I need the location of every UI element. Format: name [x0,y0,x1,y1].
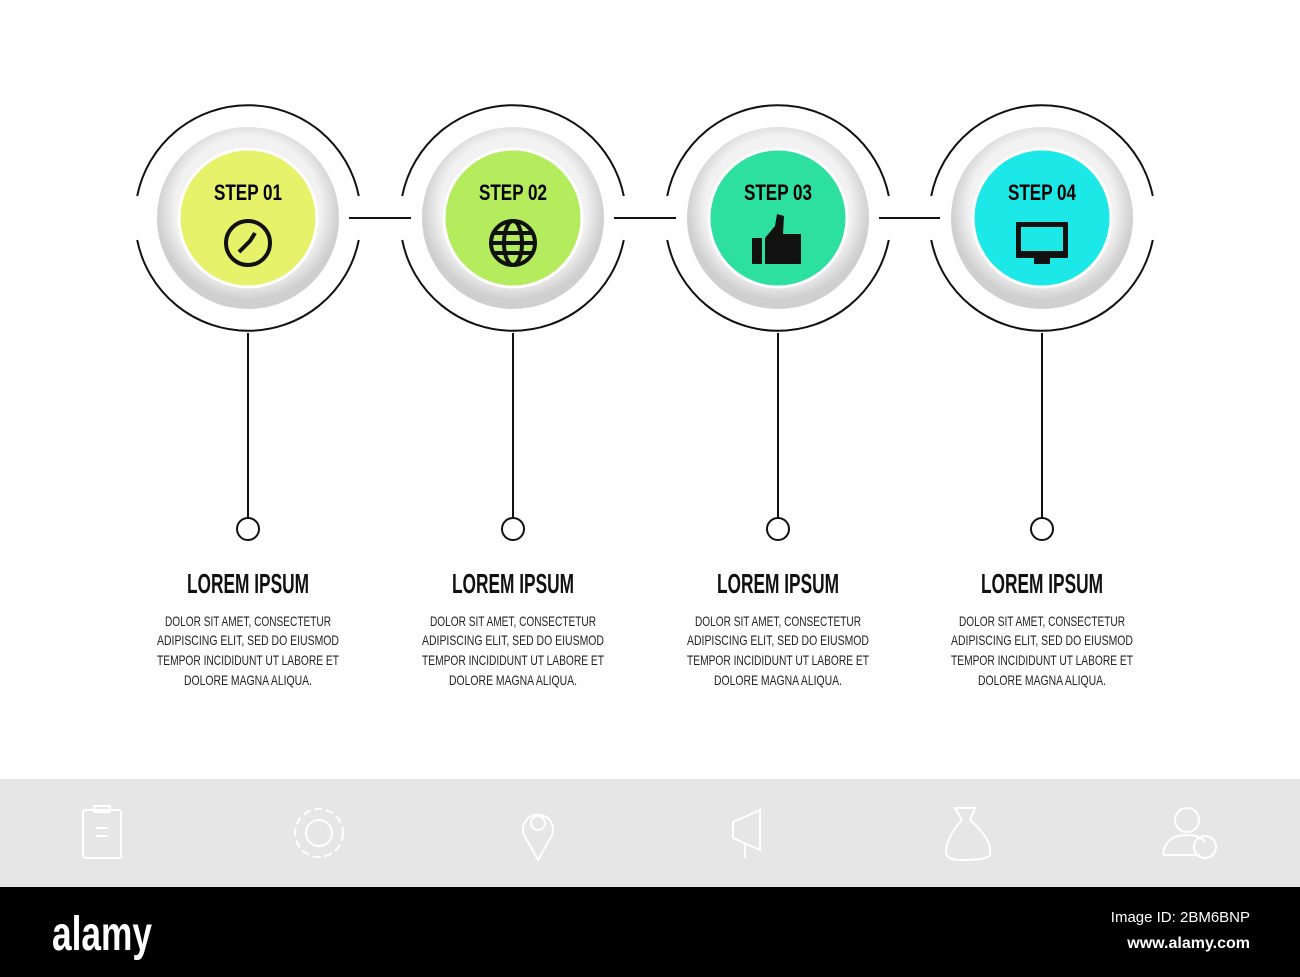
text: ADIPISCING ELIT, SED DO EIUSMOD [157,632,339,648]
text: DOLOR SIT AMET, CONSECTETUR [695,613,861,629]
text: DOLOR SIT AMET, CONSECTETUR [430,613,596,629]
text: DOLORE MAGNA ALIQUA. [714,672,842,688]
text blocks: LOREM IPSUM [452,568,574,599]
step 2: STEP 02 [479,180,547,205]
text blocks: LOREM IPSUM [981,568,1103,599]
text: ADIPISCING ELIT, SED DO EIUSMOD [422,632,604,648]
text blocks: LOREM IPSUM [717,568,839,599]
connectors [349,217,940,219]
text: DOLORE MAGNA ALIQUA. [184,672,312,688]
icon: monitor [1016,222,1068,264]
text: TEMPOR INCIDIDUNT UT LABORE ET [687,652,869,668]
footer: www.alamy.com [1126,935,1250,952]
step 4 [931,105,1153,540]
text: ADIPISCING ELIT, SED DO EIUSMOD [951,632,1133,648]
text: TEMPOR INCIDIDUNT UT LABORE ET [422,652,604,668]
icon: clock [226,221,270,265]
step 3: STEP 03 [744,180,812,205]
text: TEMPOR INCIDIDUNT UT LABORE ET [157,652,339,668]
text: DOLORE MAGNA ALIQUA. [978,672,1106,688]
footer: alamy [52,908,152,961]
text: DOLOR SIT AMET, CONSECTETUR [959,613,1125,629]
icon band [0,779,1300,887]
text blocks: LOREM IPSUM [187,568,309,599]
text: ADIPISCING ELIT, SED DO EIUSMOD [687,632,869,648]
step 1: STEP 01 [214,180,282,205]
text: DOLOR SIT AMET, CONSECTETUR [165,613,331,629]
footer [0,887,1300,977]
step 3 [667,105,889,540]
step 2 [402,105,624,540]
step 4: STEP 04 [1008,180,1077,205]
text blocks [187,568,1103,599]
text: DOLORE MAGNA ALIQUA. [449,672,577,688]
footer: Image ID: 2BM6BNP [1111,909,1250,926]
text: TEMPOR INCIDIDUNT UT LABORE ET [951,652,1133,668]
icon: globe [491,221,535,265]
icon: thumbs up [752,214,801,264]
step 1 [137,105,359,540]
